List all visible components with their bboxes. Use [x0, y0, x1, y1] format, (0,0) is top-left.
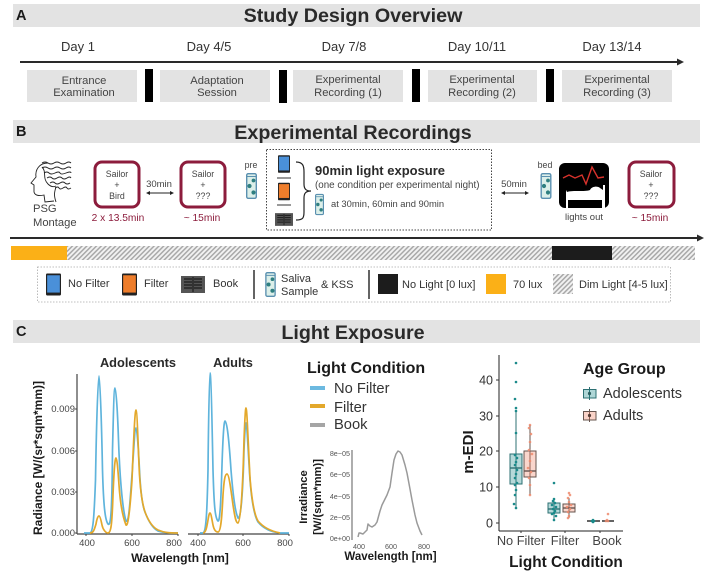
heading band B [13, 120, 700, 144]
task box: final sailor + ???: Sailor [640, 169, 662, 179]
sample times: at 30min, 60min and 90min [331, 198, 444, 209]
task box: final sailor + ??? [629, 162, 674, 207]
chart: m-EDI boxplot: 40 [479, 374, 493, 388]
chart: m-EDI boxplot: 0 [486, 516, 493, 530]
session boxes: Entrance [62, 75, 106, 87]
icon: bed saliva sample: bed [538, 160, 552, 170]
chart: adolescents radiance: 400 [79, 538, 95, 549]
chart: book irradiance: 600 [385, 542, 397, 551]
legend: light condition: Book [334, 417, 368, 433]
session boxes: Experimental [584, 74, 650, 86]
chart: m-EDI boxplot: 10 [479, 480, 493, 494]
day labels [61, 39, 642, 54]
icon: lights out bed: lights out [565, 212, 603, 223]
chart: adolescents radiance: 800 [166, 538, 182, 549]
legend: dim light [553, 274, 668, 294]
duration: 2 x 13.5min: 2 x 13.5min [92, 213, 144, 224]
icon: pre saliva sample [245, 160, 257, 198]
heading band C: Light Exposure [281, 322, 425, 344]
chart: book irradiance: [W/(sqm*mm)] [312, 459, 324, 535]
exposure note: (one condition per experimental night) [315, 180, 479, 191]
chart: book irradiance: 0e+00 [330, 534, 350, 543]
panel B: experimental recordings [10, 120, 704, 302]
chart: book irradiance: 400 [353, 542, 365, 551]
chart: adolescents radiance: 0.009 [51, 404, 75, 415]
icon: lights out bed [559, 163, 609, 223]
legend: saliva sample: & KSS [321, 279, 353, 291]
legend: no light [378, 274, 475, 294]
session boxes: Experimental [449, 74, 515, 86]
task box: final sailor + ???: ??? [644, 191, 658, 201]
adults data points [528, 425, 608, 521]
light timeline bar [11, 246, 695, 260]
chart: adults radiance [188, 355, 293, 549]
legend: filter: Filter [144, 278, 169, 290]
radiance axis title: Radiance [W/(sr*sqm*mm)] [31, 381, 45, 535]
icon: pre saliva sample: pre [245, 160, 257, 170]
heading band B: Experimental Recordings [234, 122, 472, 144]
chart: m-EDI boxplot [460, 355, 623, 571]
heading band A: Study Design Overview [244, 5, 463, 27]
legend: 70 lux: 70 lux [513, 279, 543, 291]
chart: adolescents radiance: 0.000 [51, 528, 75, 539]
legend: saliva sample [266, 273, 353, 298]
timeline arrow A [20, 58, 684, 66]
chart: m-EDI boxplot: m-EDI [460, 430, 477, 474]
legend: age group [583, 361, 682, 424]
chart: book irradiance: 4e−05 [330, 492, 350, 501]
arrow: 50min: 50min [501, 179, 527, 190]
legend: dim light: Dim Light [4-5 lux] [579, 279, 668, 291]
chart: book irradiance: 8e−05 [330, 449, 350, 458]
exposure heading: 90min light exposure [315, 163, 445, 178]
legend: light condition: Filter [334, 400, 367, 416]
task box: sailor + bird [95, 162, 139, 207]
chart: book irradiance: Irradiance [298, 470, 310, 524]
day labels: Day 13/14 [582, 39, 642, 54]
arrow: 30min: 30min [146, 179, 172, 190]
legend: saliva sample: Sample [281, 286, 318, 298]
task box: sailor + bird: Sailor [106, 169, 128, 179]
task box: sailor + bird: Bird [109, 191, 125, 201]
legend: light condition: No Filter [334, 381, 390, 397]
session boxes: Recording (3) [583, 87, 651, 99]
chart: adults radiance: Adults [213, 355, 253, 370]
session boxes: Examination [53, 87, 115, 99]
task box: sailor + ???: + [200, 180, 206, 190]
chart: book irradiance: 800 [418, 542, 430, 551]
session boxes: Session [197, 87, 237, 99]
chart: m-EDI boxplot: No Filter [497, 533, 546, 548]
session boxes [27, 70, 672, 102]
chart: m-EDI boxplot: Light Condition [509, 554, 623, 571]
chart: book irradiance: 6e−05 [330, 470, 350, 479]
task box: sailor + ??? [181, 162, 225, 207]
heading band C [13, 320, 700, 344]
PSG label: Montage [33, 217, 77, 229]
legend: no light: No Light [0 lux] [402, 279, 475, 291]
panel C: light exposure [13, 320, 700, 571]
light exposure box [266, 150, 492, 230]
adolescents boxes [510, 412, 600, 521]
chart: m-EDI boxplot: 30 [479, 410, 493, 424]
legend: book: Book [213, 278, 239, 290]
legend: saliva sample: Saliva [281, 273, 312, 285]
PSG label [33, 203, 77, 229]
day labels: Day 4/5 [187, 39, 231, 54]
adults boxes [524, 425, 614, 521]
duration: final 15min: ~ 15min [632, 213, 668, 224]
legend: book [181, 276, 239, 293]
legend: no filter: No Filter [68, 278, 110, 290]
chart: adolescents radiance: Adolescents [100, 355, 176, 370]
chart: adolescents radiance: 0.003 [51, 487, 75, 498]
heading band A [13, 4, 700, 27]
icon: PSG montage head [31, 162, 71, 202]
legend: age group: Adults [603, 408, 643, 424]
chart: adults radiance: 400 [190, 538, 206, 549]
heading band A: A [16, 8, 27, 24]
chart: m-EDI boxplot: Filter [551, 533, 580, 548]
session boxes: Recording (1) [314, 87, 382, 99]
chart: m-EDI boxplot: 20 [479, 444, 493, 458]
legend: age group: Adolescents [603, 386, 682, 402]
arrow: 30min [146, 179, 174, 195]
chart: book irradiance: 2e−05 [330, 513, 350, 522]
heading band C: C [16, 324, 27, 340]
panel A: study design overview [13, 4, 700, 103]
day labels: Day 1 [61, 39, 95, 54]
chart: adolescents radiance [51, 355, 182, 549]
arrow: 50min [501, 179, 529, 195]
task box: sailor + ???: ??? [196, 191, 210, 201]
legend: age group: Age Group [583, 361, 666, 378]
duration: 15min: ~ 15min [184, 213, 220, 224]
chart: adolescents radiance: 600 [124, 538, 140, 549]
day labels: Day 10/11 [448, 39, 506, 54]
session boxes: Recording (2) [448, 87, 516, 99]
chart: book irradiance: Wavelength [nm] [344, 551, 437, 563]
task box: sailor + ???: Sailor [192, 169, 214, 179]
chart: adolescents radiance: 0.006 [51, 446, 75, 457]
legend: light condition: Light Condition [307, 360, 425, 377]
legend: no filter [46, 274, 110, 295]
session boxes: Adaptation [190, 75, 244, 87]
task box: final sailor + ???: + [648, 180, 654, 190]
night separators [145, 69, 554, 103]
wavelength axis title: Wavelength [nm] [131, 551, 229, 565]
legend: 70 lux [486, 274, 543, 294]
chart: adults radiance: 600 [235, 538, 251, 549]
legend: filter [122, 274, 169, 295]
icons: light conditions [275, 155, 293, 226]
session boxes: Experimental [315, 74, 381, 86]
heading band B: B [16, 124, 26, 140]
chart: m-EDI boxplot: Book [592, 533, 622, 548]
legend B [38, 267, 670, 302]
chart: adults radiance: 800 [277, 538, 293, 549]
PSG label: PSG [33, 203, 57, 215]
chart: book irradiance [298, 449, 437, 563]
brace [296, 162, 311, 220]
legend: light condition [307, 360, 425, 433]
icon: exposure saliva sample [316, 194, 323, 215]
icon: bed saliva sample [538, 160, 552, 198]
adolescents data points [514, 363, 594, 522]
day labels: Day 7/8 [322, 39, 366, 54]
timeline arrow B [10, 234, 704, 242]
task box: sailor + bird: + [114, 180, 120, 190]
